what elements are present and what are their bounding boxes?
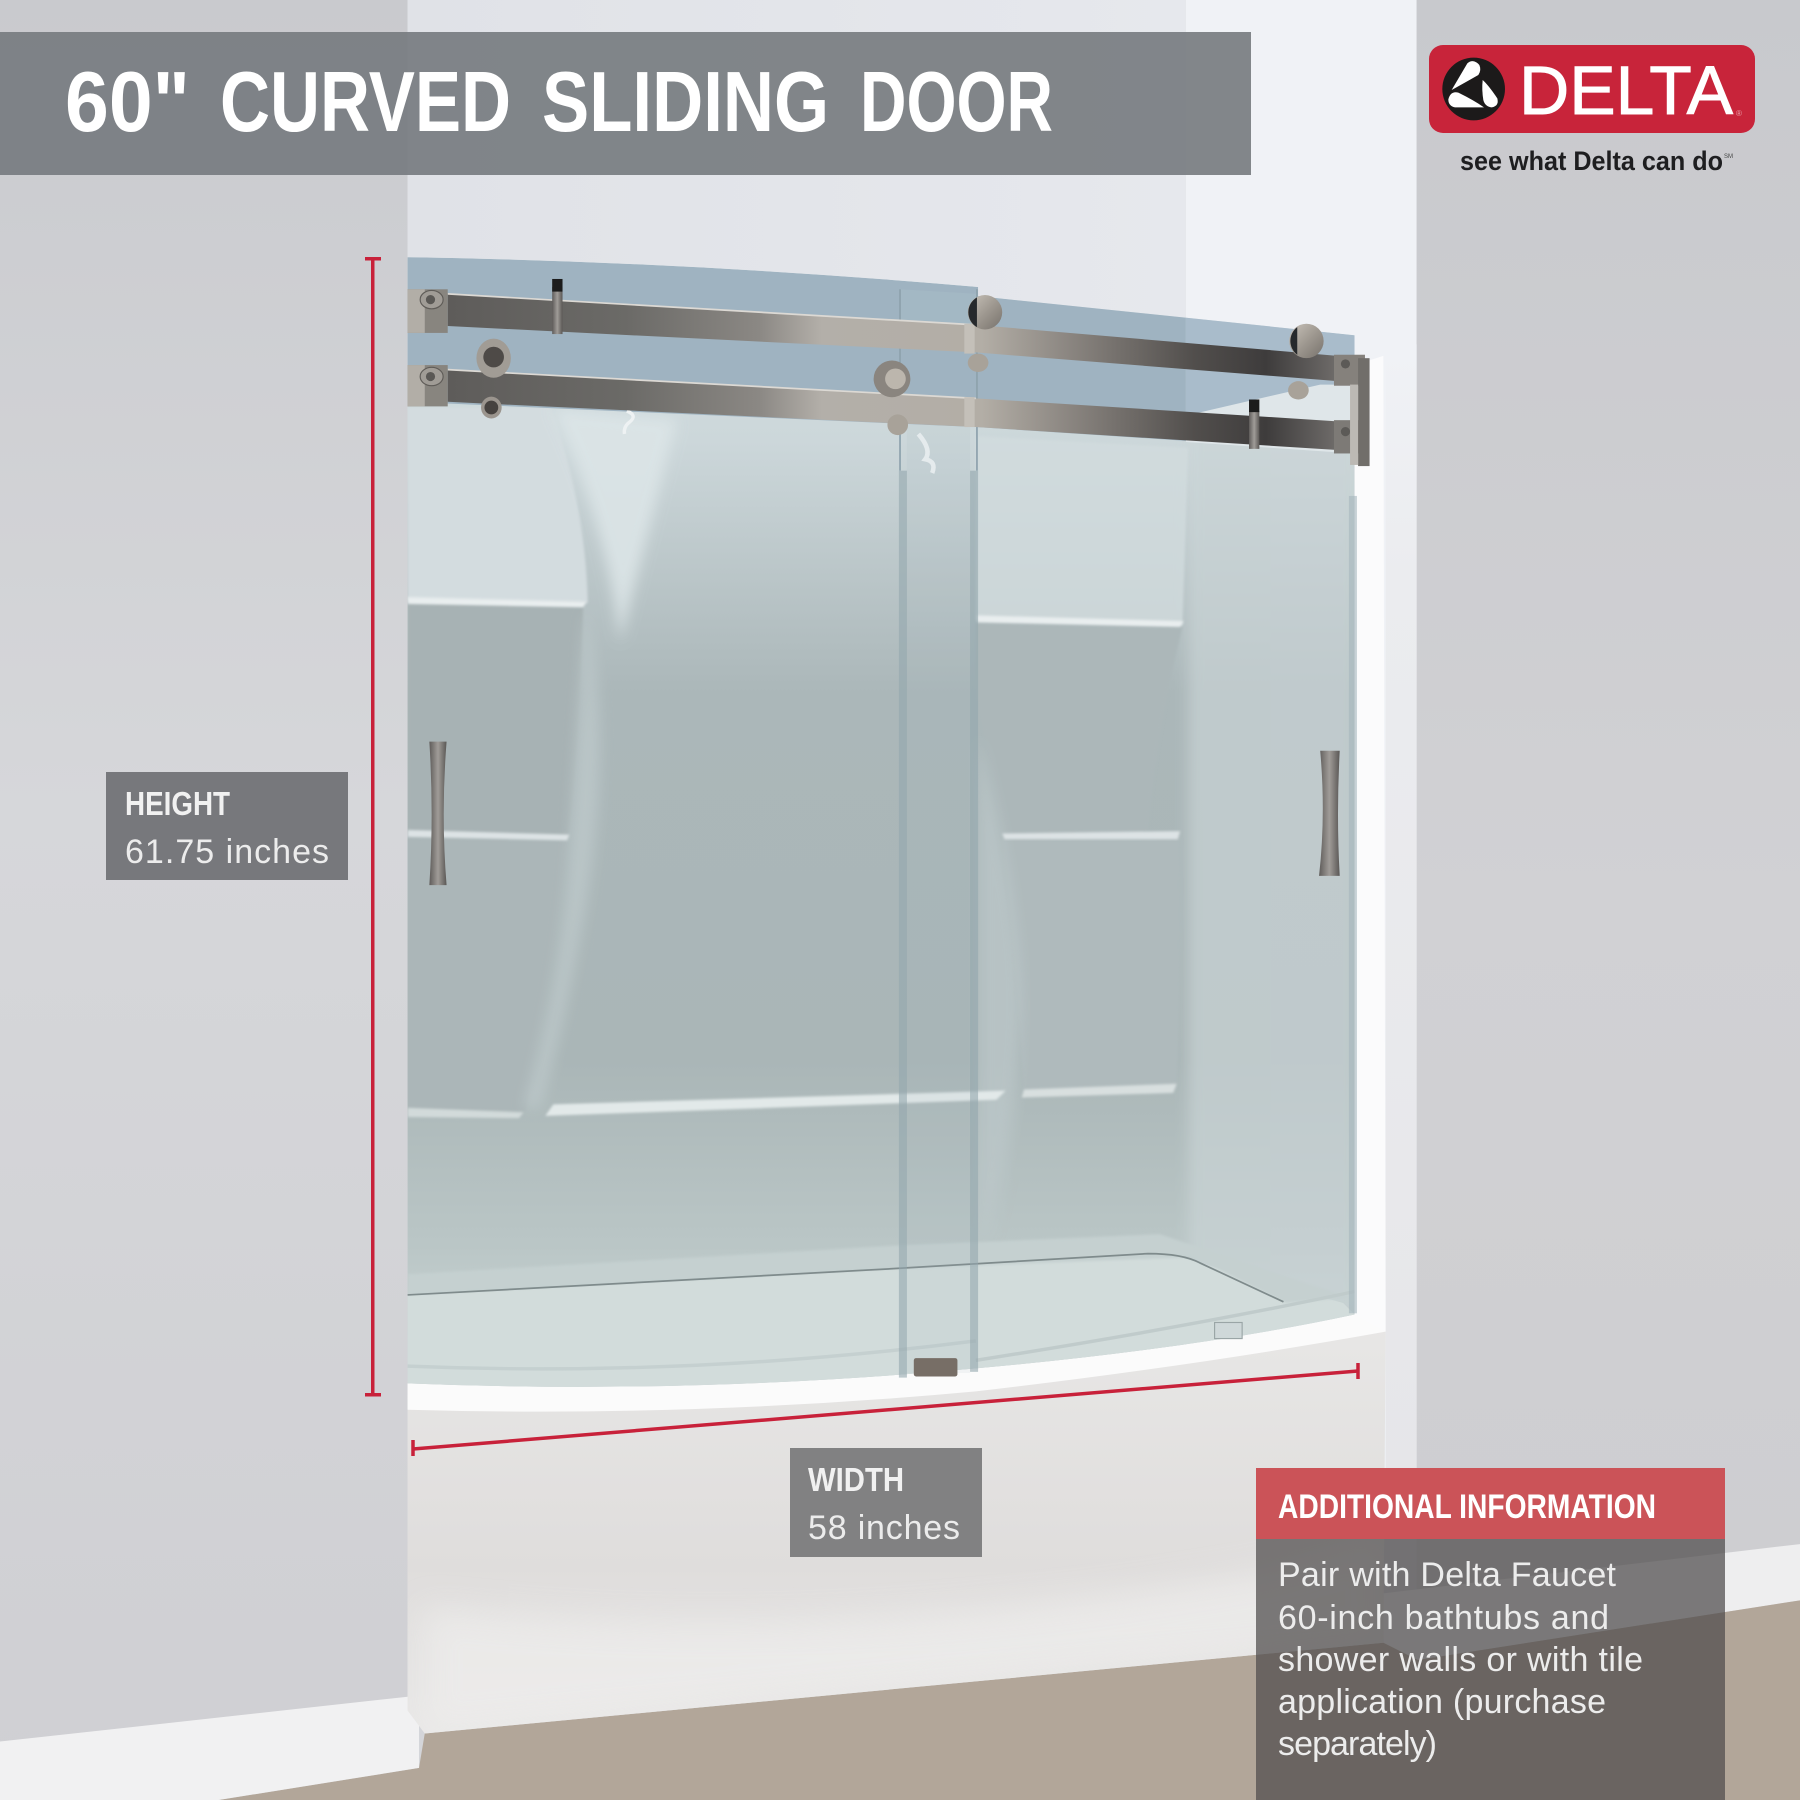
bathtub rim bbox=[408, 1314, 1386, 1412]
panel body text: 60-inch bathtubs and bbox=[1278, 1599, 1609, 1637]
right wave highlight bbox=[980, 784, 1019, 1146]
logo wordmark: DELTA bbox=[1519, 52, 1733, 129]
centre overlap of door panels bbox=[899, 289, 978, 1378]
height label: HEIGHT bbox=[125, 785, 230, 822]
panel heading bar bbox=[1256, 1468, 1725, 1539]
right door handle bbox=[1319, 751, 1340, 876]
left wall brackets bbox=[408, 289, 448, 406]
panel body text: shower walls or with tile bbox=[1278, 1641, 1643, 1679]
panel: additional information bbox=[1256, 1468, 1725, 1800]
logo red badge bbox=[1429, 45, 1755, 133]
title text bbox=[65, 55, 1053, 150]
glue marks below rail bbox=[624, 411, 633, 434]
right shelf alcoves bbox=[978, 624, 1180, 638]
right baseboard bbox=[1383, 1544, 1800, 1660]
height label bbox=[106, 772, 348, 880]
right door edge bbox=[1349, 496, 1357, 1313]
back wall bbox=[408, 0, 1186, 482]
panel body text: Pair with Delta Faucet bbox=[1278, 1556, 1617, 1594]
registered mark: ® bbox=[1736, 109, 1742, 118]
tagline: see what Delta can do bbox=[1460, 146, 1723, 176]
stopper right bbox=[1249, 411, 1259, 449]
left wall bbox=[0, 0, 408, 1800]
left door handle bbox=[429, 742, 447, 885]
width label: WIDTH bbox=[808, 1461, 904, 1498]
right wall bbox=[1417, 0, 1800, 1800]
panel body bbox=[1256, 1539, 1725, 1800]
tub side wall strip bbox=[1386, 344, 1417, 1492]
height dimension line bbox=[365, 257, 381, 1396]
floor bbox=[218, 1600, 1800, 1800]
shelves bbox=[408, 597, 587, 607]
upper stopper left bbox=[552, 287, 563, 334]
lower rail bbox=[448, 370, 1337, 450]
upper rail bbox=[448, 294, 1337, 381]
title banner bbox=[0, 32, 1251, 175]
bathtub apron bbox=[408, 1318, 1386, 1733]
tub ledge and basin bbox=[408, 1257, 1354, 1360]
apron highlight bbox=[452, 1585, 1256, 1658]
width label: 58 inches bbox=[808, 1509, 960, 1547]
left shelf alcoves bbox=[408, 604, 583, 670]
bright side wall bbox=[1186, 0, 1417, 1492]
blue tint above the door rails bbox=[408, 257, 1186, 441]
height label: 61.75 inches bbox=[125, 833, 329, 871]
lighter right wall section bbox=[1187, 548, 1349, 1284]
roller centre bbox=[874, 360, 910, 397]
shower interior seen through glass bbox=[408, 257, 1360, 1405]
right wall bracket bbox=[1334, 355, 1370, 466]
title text: DOOR bbox=[860, 55, 1053, 150]
title text: 60" bbox=[65, 55, 190, 150]
title text: CURVED bbox=[220, 55, 511, 150]
service mark: SM bbox=[1724, 154, 1733, 160]
disc upper centre bbox=[968, 295, 1002, 329]
panel heading: ADDITIONAL INFORMATION bbox=[1278, 1488, 1656, 1526]
Delta logo bbox=[1429, 45, 1755, 176]
door rollers and stoppers bbox=[476, 279, 1324, 449]
icon: Delta triangle mark bbox=[1442, 58, 1505, 120]
left curved panel bbox=[408, 449, 588, 603]
photo: curved glass shower door bbox=[408, 257, 1370, 1405]
width dimension line bbox=[413, 1363, 1358, 1456]
left baseboard bbox=[0, 1697, 419, 1800]
left wave highlight bbox=[528, 664, 600, 1102]
width label bbox=[790, 1448, 982, 1557]
bottom door guide bbox=[1215, 1322, 1242, 1339]
upper door panel edge bbox=[900, 289, 978, 344]
panel body text bbox=[1278, 1556, 1643, 1763]
disc upper right bbox=[1289, 324, 1324, 358]
panel body text: application (purchase bbox=[1278, 1683, 1606, 1721]
roller left back bbox=[476, 339, 511, 378]
title text: SLIDING bbox=[542, 55, 829, 150]
panel body text: separately) bbox=[1278, 1725, 1437, 1763]
